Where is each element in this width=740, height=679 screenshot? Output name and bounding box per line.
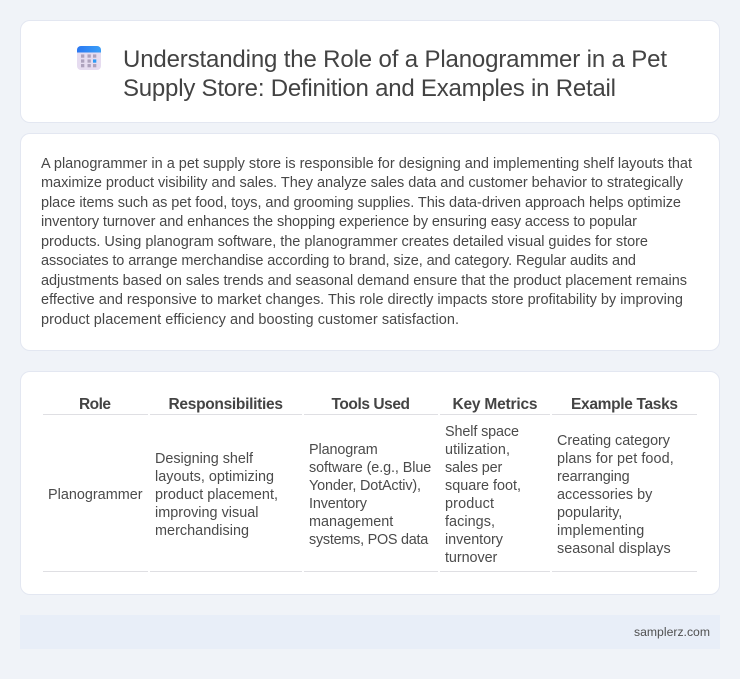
table cell: example tasks: popularity, xyxy=(557,505,622,521)
title xyxy=(123,46,667,102)
table cell: key metrics: turnover xyxy=(445,550,498,566)
text block: description: effective and responsive to market changes. This role directly impacts store profitability by improving xyxy=(41,292,683,308)
table cell: example tasks: seasonal displays xyxy=(557,541,671,557)
panel: header xyxy=(20,20,720,123)
table cell: tools used: Yonder, DotActiv), xyxy=(309,478,421,494)
table cell: key metrics: utilization, xyxy=(445,442,510,458)
title: Understanding the Role of a Planogrammer in a Pet xyxy=(123,46,667,73)
table cell: key metrics xyxy=(445,424,521,566)
table cell: key metrics: sales per xyxy=(445,460,503,476)
panel: table xyxy=(20,371,720,595)
table cell: example tasks: accessories by xyxy=(557,487,653,503)
table cell: role: Planogrammer xyxy=(48,487,143,503)
footer text: source: samplerz.com xyxy=(634,625,710,639)
table cell: key metrics: facings, xyxy=(445,514,495,530)
table cell: tools used: Inventory xyxy=(309,496,368,512)
text block: description: maximize product visibility and sales. They analyze sales data and customer behavior to strategically xyxy=(41,175,684,191)
table cell: example tasks: rearranging xyxy=(557,469,630,485)
table header: Key Metrics: Key Metrics xyxy=(452,396,538,413)
text block: description: adjustments based on sales trends and seasonal demand ensure that the product placement remains xyxy=(41,273,687,289)
text block: description: inventory turnover and enhances the shopping experience by ensuring easy access to popular xyxy=(41,214,637,230)
table header: Tools Used: Tools Used xyxy=(332,396,410,413)
icon: calendar grid xyxy=(77,46,101,70)
table cell: tools used: systems, POS data xyxy=(309,532,428,548)
text block: description: place items such as pet food, toys, and grooming supplies. This data-driven approach helps optimize xyxy=(41,195,681,211)
table header: Role: Role xyxy=(79,396,111,413)
text block: description: products. Using planogram software, the planogrammer creates detailed visual guides for store xyxy=(41,234,648,250)
table cell: example tasks: implementing xyxy=(557,523,644,539)
table cell: tools used: management xyxy=(309,514,393,530)
table cell: tools used: Planogram xyxy=(309,442,378,458)
table cell: key metrics: inventory xyxy=(445,532,504,548)
table cell: example tasks: plans for pet food, xyxy=(557,451,674,467)
table cell: tools used xyxy=(309,442,431,548)
table cell: key metrics: Shelf space xyxy=(445,424,519,440)
table cell: example tasks xyxy=(557,433,674,557)
footer bar xyxy=(20,615,720,649)
table header: Responsibilities: Responsibilities xyxy=(168,396,283,413)
text block: description: A planogrammer in a pet supply store is responsible for designing and implementing shelf layouts that xyxy=(41,156,692,172)
table cell: responsibilities: improving visual xyxy=(155,505,258,521)
text block: description xyxy=(41,156,692,328)
table cell: key metrics: product xyxy=(445,496,494,512)
table cell: responsibilities: merchandising xyxy=(155,523,249,539)
panel: description xyxy=(20,133,720,351)
table cell: key metrics: square foot, xyxy=(445,478,521,494)
text block: description: product placement efficiency and boosting customer satisfaction. xyxy=(41,312,459,328)
table cell: example tasks: Creating category xyxy=(557,433,671,449)
table header: Example Tasks: Example Tasks xyxy=(571,396,678,413)
table cell: tools used: software (e.g., Blue xyxy=(309,460,431,476)
table cell: responsibilities: Designing shelf xyxy=(155,451,254,467)
table cell: responsibilities: layouts, optimizing xyxy=(155,469,274,485)
title: Supply Store: Definition and Examples in Retail xyxy=(123,75,616,102)
table cell: responsibilities: product placement, xyxy=(155,487,278,503)
text block: description: associates to arrange merchandise according to brand, size, and category. Regular audits and xyxy=(41,253,636,269)
table cell: responsibilities xyxy=(155,451,278,539)
